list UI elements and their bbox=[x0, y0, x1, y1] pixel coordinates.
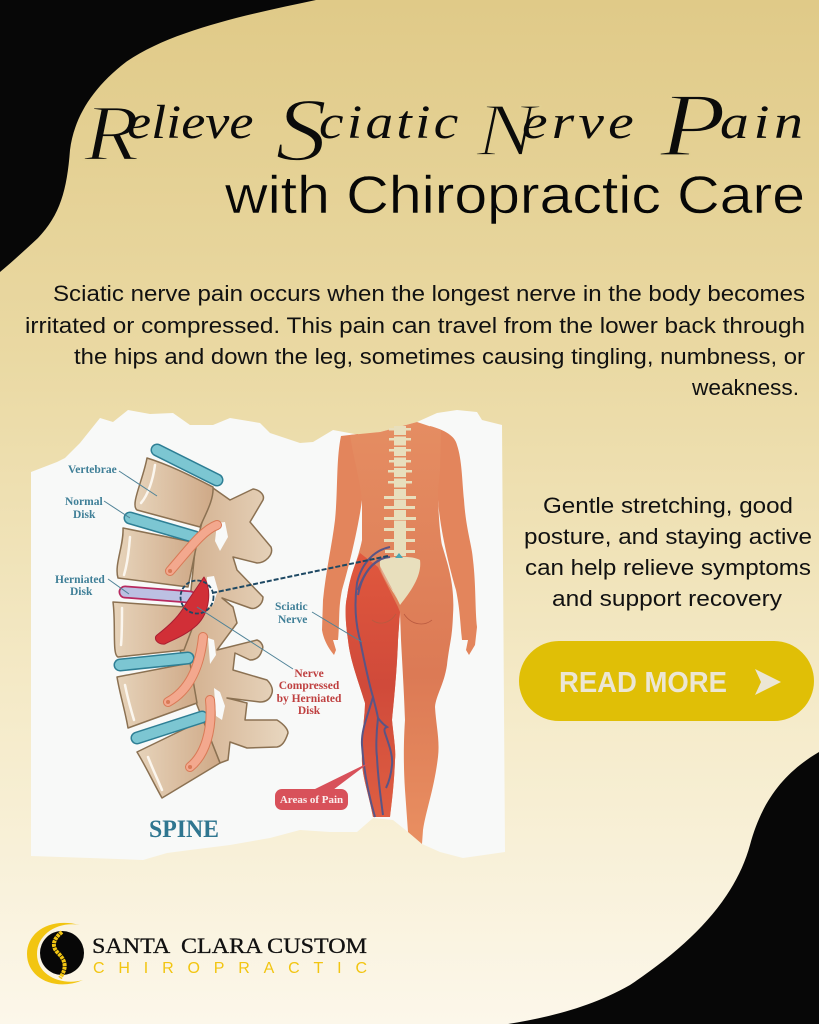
spine column bbox=[380, 426, 420, 605]
title script line: N bbox=[475, 88, 542, 171]
icon: play arrow bbox=[755, 669, 781, 695]
label: Nerve Compressed: Nerve bbox=[294, 668, 324, 680]
logo bbox=[27, 923, 367, 984]
label: Sciatic Nerve: Nerve bbox=[278, 614, 307, 626]
logo black circle bbox=[40, 931, 84, 975]
vertebra 3 bbox=[113, 602, 200, 657]
label: Vertebrae: Vertebrae bbox=[68, 464, 117, 476]
healthy nerve roots bbox=[168, 525, 217, 767]
title script line: elieve bbox=[127, 96, 253, 149]
vertebra 1 bbox=[135, 458, 213, 527]
top-left black shape bbox=[0, 0, 316, 272]
label: Sciatic Nerve bbox=[275, 601, 308, 626]
bone highlights bbox=[121, 465, 162, 790]
compression circle bbox=[180, 580, 214, 614]
title script line: P bbox=[659, 74, 726, 175]
label: Areas of Pain bbox=[275, 762, 370, 810]
vertebra 4 bbox=[117, 663, 197, 728]
title script line: ciatic bbox=[319, 96, 462, 149]
read more button: READ MORE bbox=[559, 667, 727, 699]
title script line: S bbox=[275, 80, 327, 179]
intro paragraph: irritated or compressed. This pain can travel from the lower back through bbox=[25, 313, 805, 338]
side text: and support recovery bbox=[552, 586, 782, 611]
label: Nerve Compressed: Disk bbox=[298, 705, 321, 717]
label: Normal Disk: Normal bbox=[65, 496, 103, 508]
title script line: R bbox=[83, 90, 139, 178]
label: Nerve Compressed: by Herniated bbox=[277, 693, 342, 705]
sacrum bbox=[380, 557, 420, 605]
title bbox=[83, 74, 808, 225]
side text: can help relieve symptoms bbox=[525, 555, 811, 580]
figure: body back view bbox=[322, 422, 477, 844]
intro paragraph: weakness. bbox=[691, 375, 799, 400]
title script line bbox=[83, 74, 808, 179]
right arm bbox=[430, 426, 477, 655]
label: Nerve Compressed bbox=[277, 668, 342, 717]
logo wordmark: SANTA CLARA CUSTOM bbox=[92, 933, 367, 958]
herniated disk bbox=[125, 592, 190, 597]
leader lines bbox=[104, 471, 362, 669]
torso and legs bbox=[346, 422, 453, 844]
side text bbox=[524, 493, 812, 611]
panel: torn paper illustration bbox=[31, 410, 505, 860]
label: Herniated Disk: Disk bbox=[70, 586, 93, 598]
label: Normal Disk bbox=[65, 496, 103, 521]
intro paragraph: the hips and down the leg, sometimes causing tingling, numbness, or bbox=[74, 344, 805, 369]
label: Normal Disk: Disk bbox=[73, 509, 96, 521]
foramen holes bbox=[206, 522, 228, 720]
label: Herniated Disk bbox=[55, 574, 105, 598]
label: Herniated Disk: Herniated bbox=[55, 574, 105, 586]
left arm bbox=[322, 434, 362, 655]
logo spine bbox=[54, 932, 65, 978]
vertebra 2 bbox=[117, 528, 197, 587]
side text: posture, and staying active bbox=[524, 524, 812, 549]
intro paragraph: Sciatic nerve pain occurs when the longest nerve in the body becomes bbox=[53, 281, 805, 306]
intro paragraph bbox=[25, 281, 805, 400]
logo crescent bbox=[27, 923, 83, 984]
title script line: erve bbox=[522, 96, 638, 149]
vertebral processes bbox=[180, 488, 288, 763]
title script line: ain bbox=[720, 96, 808, 149]
spine diagram bbox=[113, 450, 288, 798]
vertebra 5 bbox=[137, 720, 220, 798]
sciatic nerve bbox=[356, 547, 392, 817]
title second line: with Chiropractic Care bbox=[224, 166, 805, 225]
buttock creases bbox=[372, 614, 432, 624]
bottom-right black shape bbox=[508, 752, 819, 1024]
red painful leg bbox=[346, 553, 400, 817]
label: Sciatic Nerve: Sciatic bbox=[275, 601, 308, 613]
read more button bbox=[519, 641, 814, 721]
label: Nerve Compressed: Compressed bbox=[279, 680, 340, 692]
dashed link line bbox=[212, 556, 388, 593]
label: Areas of Pain: Areas of Pain bbox=[280, 794, 343, 806]
label: SPINE: SPINE bbox=[149, 816, 219, 843]
torn white paper bbox=[31, 410, 505, 860]
logo subline: CHIROPRACTIC bbox=[93, 960, 367, 977]
disks bbox=[120, 450, 217, 738]
compressed red nerve bbox=[155, 577, 209, 644]
side text: Gentle stretching, good bbox=[543, 493, 793, 518]
